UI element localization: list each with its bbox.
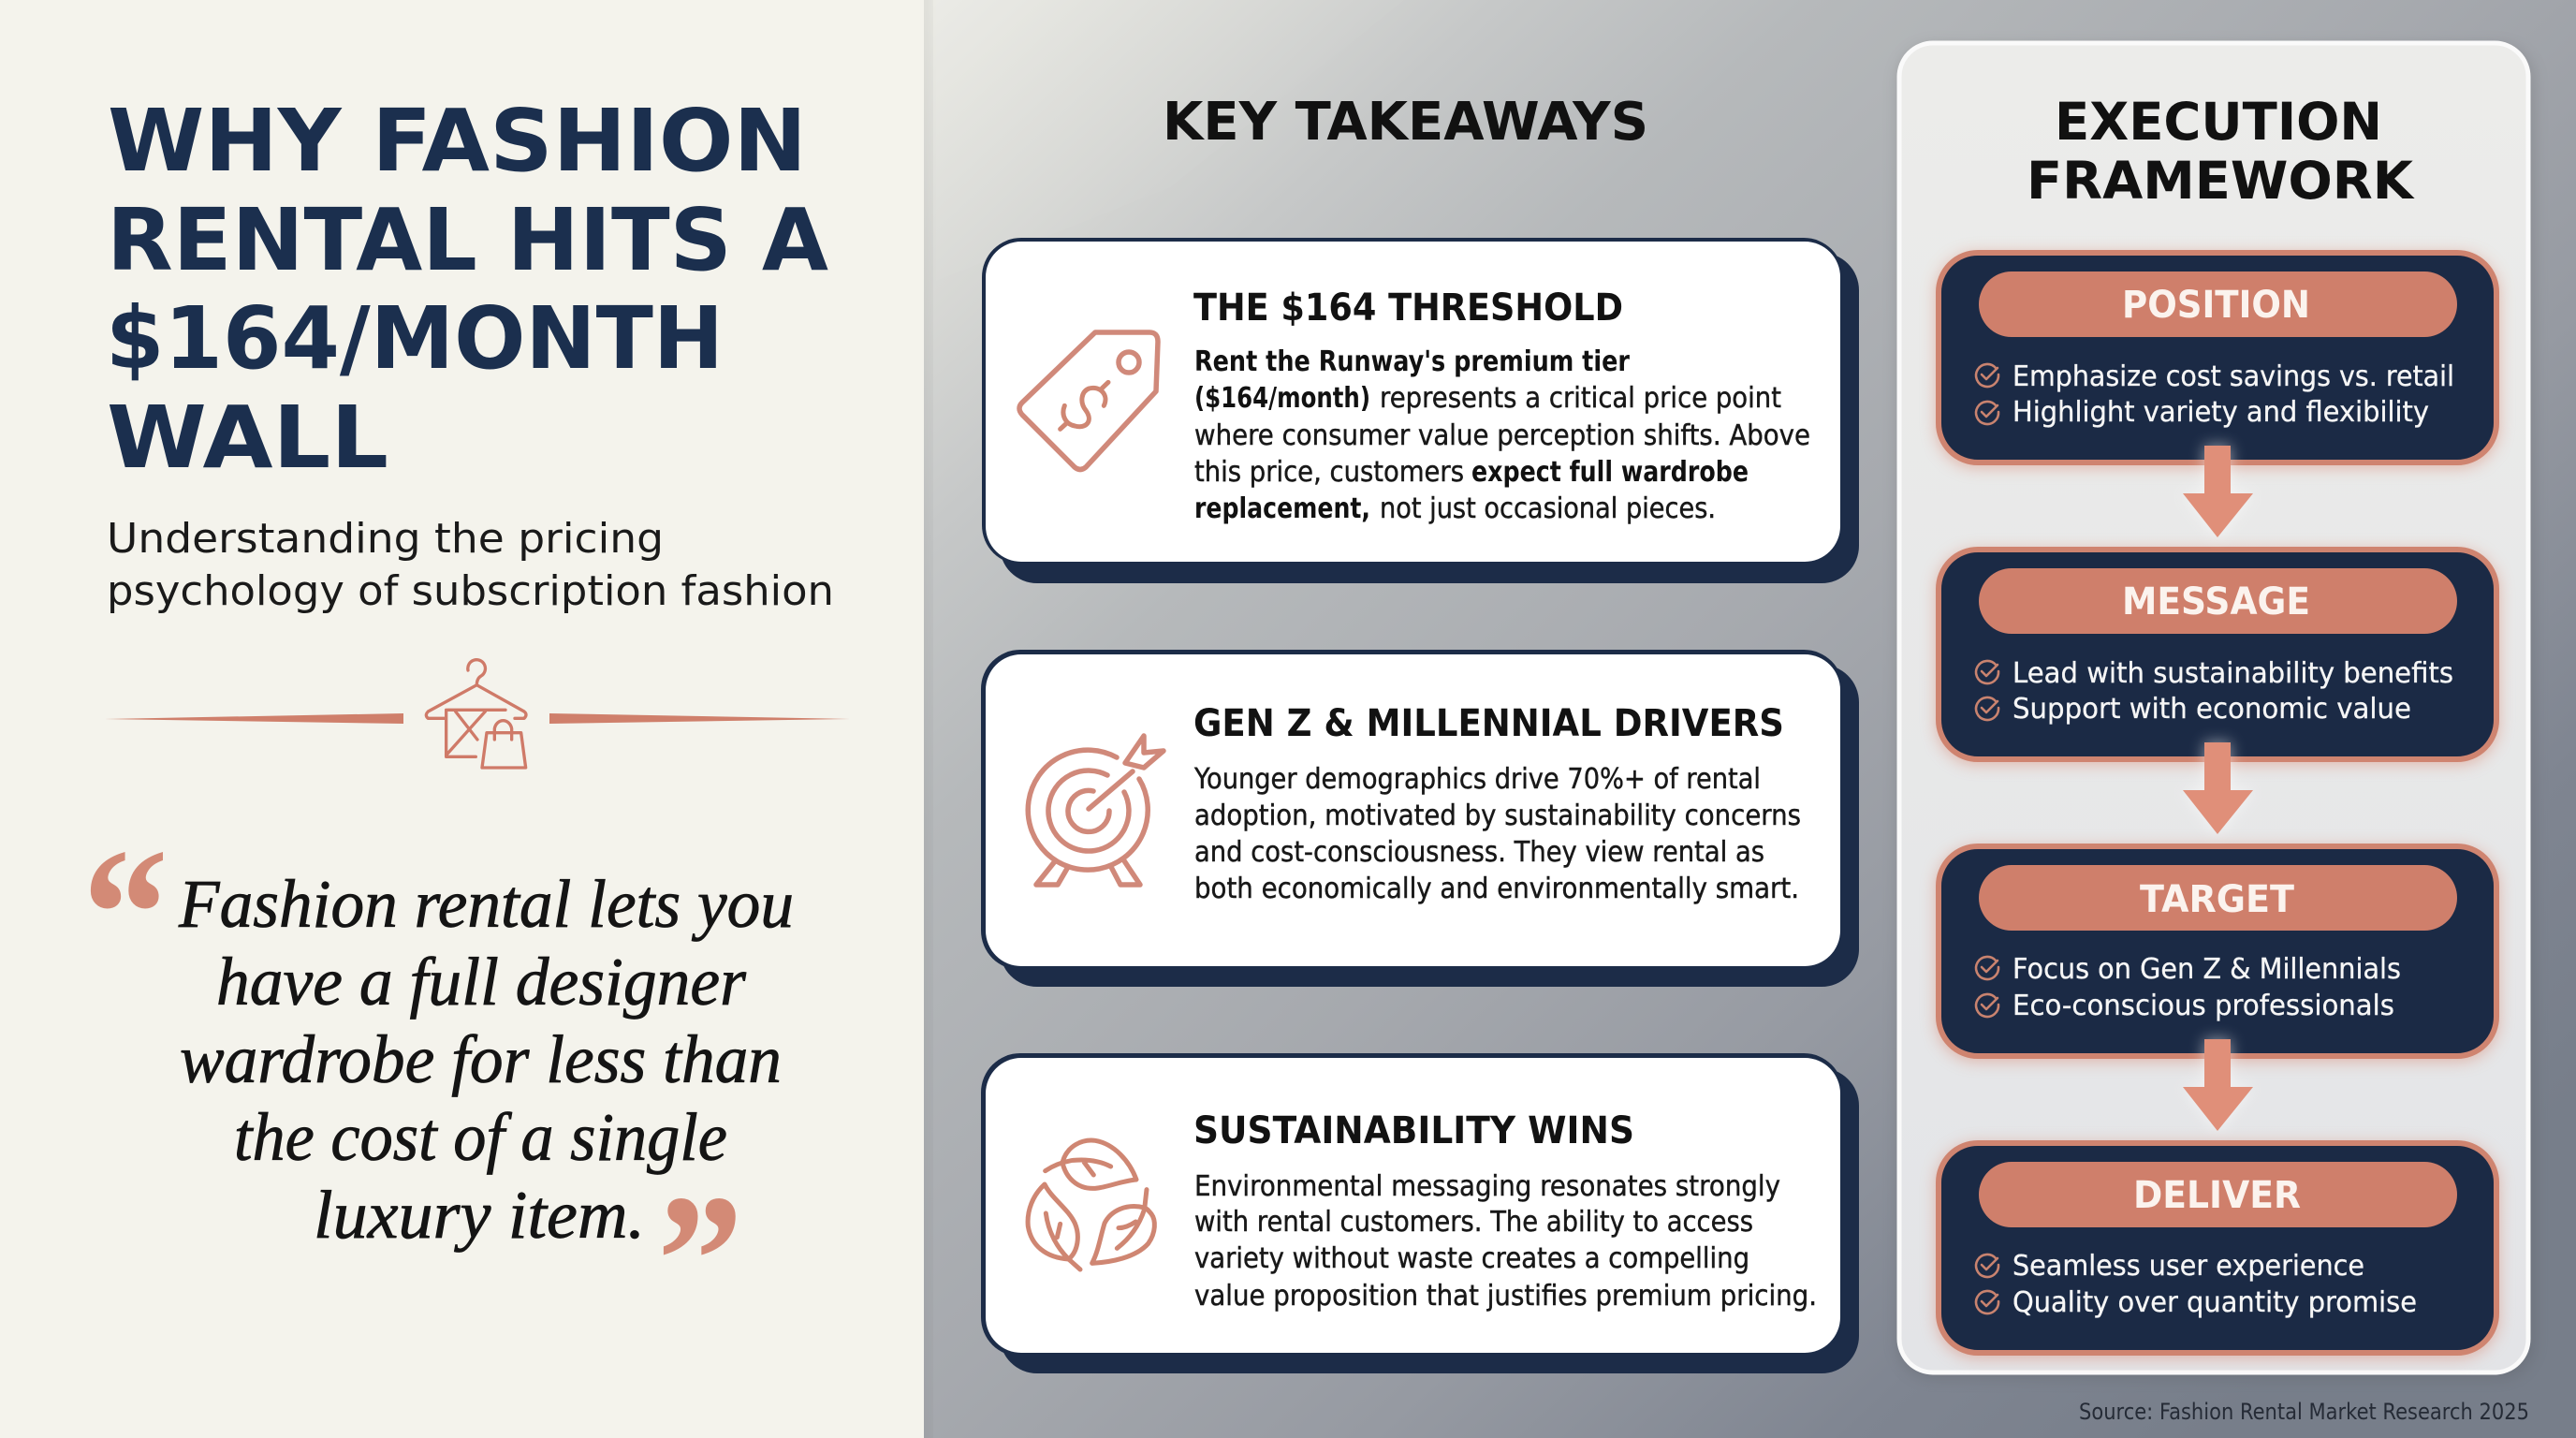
pull quote: “ — [82, 811, 168, 1018]
step: message: MESSAGE — [2122, 580, 2310, 624]
subtitle: psychology of subscription fashion — [107, 567, 834, 615]
panel: execution framework — [1897, 43, 2534, 1378]
step: deliver: DELIVER — [2133, 1174, 2301, 1217]
step: deliver: Seamless user experience — [2012, 1250, 2364, 1283]
title — [106, 91, 828, 488]
step: position: Emphasize cost savings vs. retail — [2012, 360, 2454, 393]
title: WHY FASHION — [108, 91, 807, 191]
divider with hanger and shopping bag icon — [105, 660, 850, 768]
card body text: and cost-consciousness. They view rental as — [1194, 836, 1764, 869]
card: gen z and millennial drivers — [981, 650, 1859, 987]
card body text: with rental customers. The ability to access — [1194, 1206, 1753, 1239]
card body text: not just occasional pieces. — [1380, 492, 1716, 525]
card body text: Younger demographics drive 70%+ of rental — [1193, 763, 1761, 796]
step: deliver — [1936, 1143, 2499, 1358]
arrow: position to message — [2183, 446, 2253, 537]
subtitle — [107, 515, 834, 615]
title: $164/MONTH — [106, 288, 724, 389]
card body text: value proposition that justifies premium pricing. — [1194, 1280, 1817, 1313]
card body text: this price, customers — [1194, 456, 1464, 489]
card body text: replacement, — [1194, 492, 1370, 525]
arrow: target to deliver — [2183, 1039, 2253, 1131]
heading: key takeaways: KEY TAKEAWAYS — [1163, 92, 1648, 153]
step: position — [1936, 253, 2499, 468]
step: position: Highlight variety and flexibility — [2012, 396, 2429, 429]
pull quote: have a full designer — [216, 944, 747, 1020]
step: message: Support with economic value — [2012, 693, 2411, 726]
title: RENTAL HITS A — [107, 190, 828, 290]
title: WALL — [107, 388, 388, 488]
pull quote: the cost of a single — [234, 1099, 727, 1175]
pull quote: Fashion rental lets you — [178, 866, 794, 942]
card body text — [1193, 763, 1801, 905]
step: target: Focus on Gen Z & Millennials — [2012, 953, 2401, 986]
step: target — [1936, 846, 2499, 1062]
step: position: POSITION — [2122, 284, 2310, 327]
card body text: ($164/month) — [1194, 382, 1370, 415]
step: deliver: Quality over quantity promise — [2012, 1286, 2417, 1319]
icon: target with arrow — [1028, 736, 1164, 885]
step: message: Lead with sustainability benefits — [2012, 657, 2453, 690]
card body text: where consumer value perception shifts. Above — [1194, 419, 1810, 452]
card body text: adoption, motivated by sustainability concerns — [1194, 800, 1801, 832]
arrow: message to target — [2183, 742, 2253, 834]
pull quote: luxury item. — [314, 1177, 645, 1253]
card body text — [1194, 1170, 1817, 1313]
panel: title and quote sidebar — [0, 0, 930, 1438]
subtitle: Understanding the pricing — [107, 515, 664, 563]
card body text: represents a critical price point — [1380, 382, 1781, 415]
icon: three leaves — [1028, 1140, 1154, 1269]
pull quote: ” — [657, 1157, 743, 1364]
card heading: THE $164 THRESHOLD — [1193, 286, 1623, 330]
step: target: TARGET — [2140, 878, 2295, 921]
card body text: Environmental messaging resonates strongly — [1194, 1170, 1780, 1203]
card body text: variety without waste creates a compelling — [1194, 1242, 1749, 1275]
pull quote — [82, 811, 794, 1364]
card body text — [1194, 345, 1810, 525]
card heading: GEN Z & MILLENNIAL DRIVERS — [1193, 702, 1784, 745]
card: the $164 threshold — [982, 238, 1859, 583]
card heading: SUSTAINABILITY WINS — [1193, 1109, 1634, 1152]
card body text: both economically and environmentally smart. — [1194, 873, 1799, 905]
heading: execution framework: FRAMEWORK — [2027, 151, 2415, 211]
card body text: expect full wardrobe — [1471, 456, 1749, 489]
heading: execution framework: EXECUTION — [2055, 92, 2382, 152]
step: message — [1936, 550, 2499, 765]
icon: price tag — [1019, 332, 1158, 470]
heading: execution framework — [2027, 92, 2415, 211]
pull quote: wardrobe for less than — [180, 1021, 782, 1097]
step: target: Eco-conscious professionals — [2012, 990, 2394, 1022]
card body text: Rent the Runway's premium tier — [1194, 345, 1630, 378]
card: sustainability wins — [981, 1053, 1859, 1373]
